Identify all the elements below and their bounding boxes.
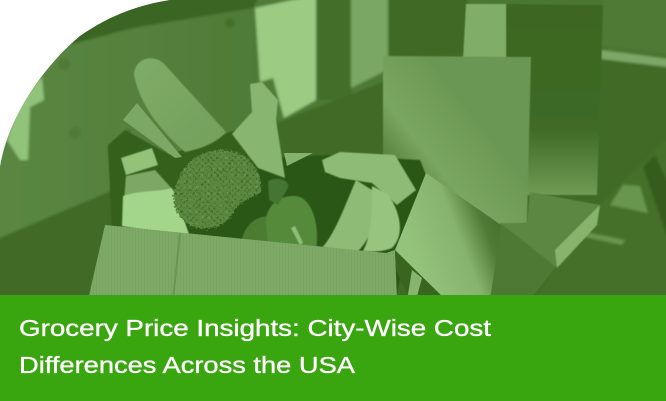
broccoli (173, 150, 261, 229)
cardboard box front (88, 225, 397, 300)
paper triangle (284, 153, 313, 166)
bananas (320, 180, 400, 252)
baguette (134, 58, 226, 152)
crumpled paper (232, 82, 285, 178)
dark interior of box (186, 154, 426, 293)
back paper bag (463, 4, 603, 195)
title text: Differences Across the USA (19, 352, 356, 378)
bell pepper (242, 179, 317, 250)
title text: Grocery Price Insights: City-Wise Cost (19, 315, 492, 341)
celery stalks (123, 103, 182, 158)
base colour (0, 0, 170, 167)
table leg (643, 156, 666, 234)
box side panel (395, 250, 404, 278)
hero photo: grocery box on table with green duotone (0, 0, 666, 308)
title banner (0, 295, 666, 401)
cardboard box flap (395, 173, 501, 300)
bottle (121, 148, 190, 237)
tissue paper (322, 152, 416, 205)
title text (19, 315, 492, 378)
kitchen cabinet background (0, 0, 666, 308)
dark area behind bottle and bread (108, 130, 251, 226)
front paper bag (383, 56, 531, 225)
box inner strip (408, 270, 422, 295)
wooden table end (485, 192, 600, 300)
